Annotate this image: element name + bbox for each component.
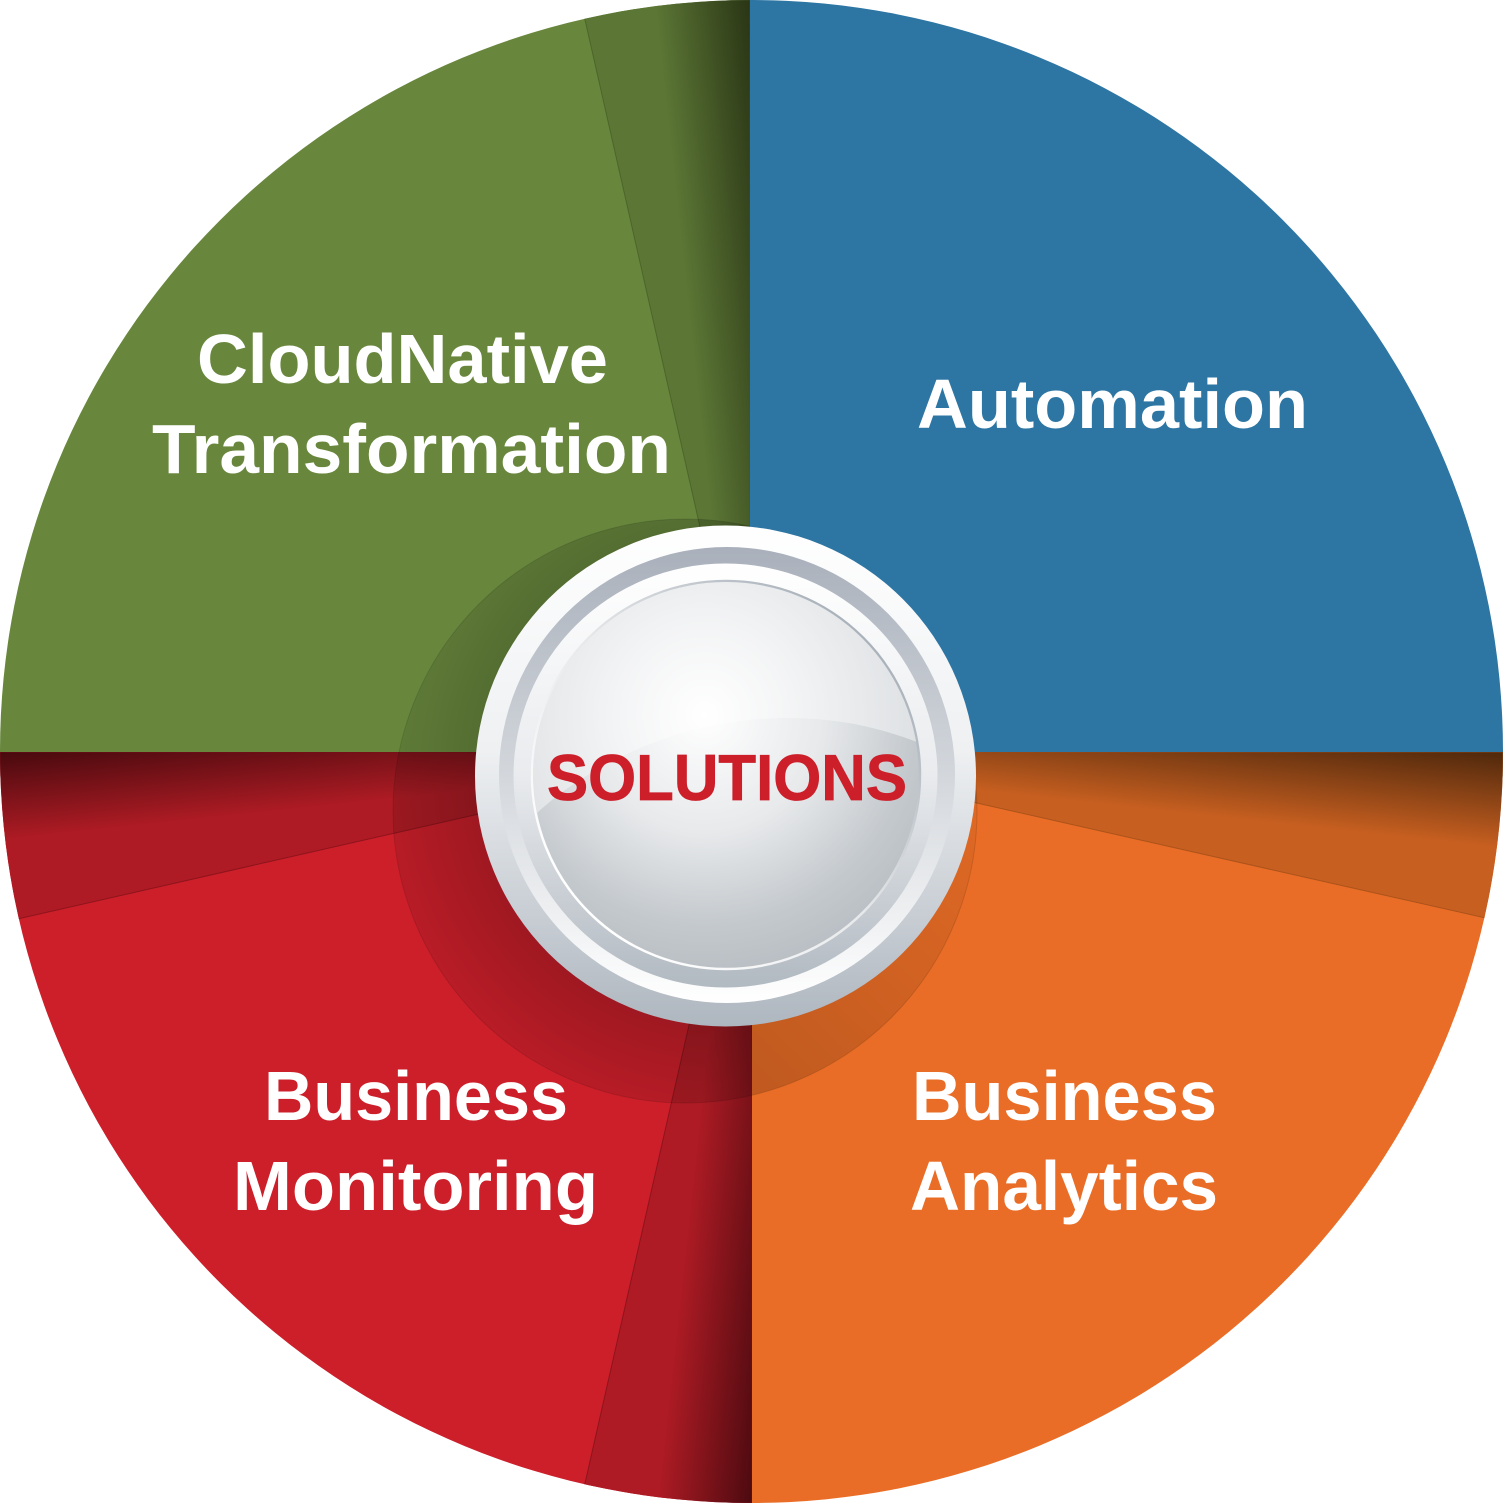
- panel: CloudNative Transformation: [0, 0, 750, 752]
- outer ring: [475, 526, 976, 1026]
- shadow: green side: [398, 518, 750, 752]
- fold: red left: [0, 752, 478, 920]
- label: Business Monitoring: [233, 1057, 598, 1225]
- dome gloss: [533, 582, 916, 814]
- label: Business Monitoring: Business: [264, 1057, 568, 1135]
- label: Business Monitoring: Monitoring: [233, 1147, 598, 1225]
- panel: Automation: [750, 0, 1503, 752]
- shadow: orange side: [752, 783, 978, 1096]
- label: Automation: Automation: [917, 365, 1308, 443]
- center button: Solutions: [475, 526, 976, 1026]
- quadrant: red: [0, 752, 752, 1503]
- dome: [532, 581, 920, 969]
- recessed ring: [499, 547, 955, 1003]
- panel: Business Analytics: [752, 752, 1503, 1503]
- label: CloudNative Transformation: CloudNative: [197, 320, 608, 398]
- label: Business Analytics: Analytics: [910, 1147, 1218, 1225]
- label: CloudNative Transformation: Transformation: [152, 410, 671, 488]
- label: Business Analytics: [910, 1057, 1218, 1225]
- shadow: red side: [392, 752, 752, 1104]
- quadrant: green: [0, 0, 750, 752]
- label: CloudNative Transformation: [152, 320, 671, 488]
- label: SOLUTIONS: SOLUTIONS: [547, 741, 907, 814]
- quadrant: orange: [752, 752, 1503, 1503]
- quadrant: blue: [750, 0, 1503, 752]
- fold: orange: [974, 752, 1503, 918]
- panel: Business Monitoring: [0, 752, 752, 1503]
- fold: green: [584, 0, 750, 527]
- label: Business Analytics: Business: [912, 1057, 1217, 1135]
- fold: red bottom: [584, 1024, 752, 1503]
- raised ring: [514, 564, 938, 988]
